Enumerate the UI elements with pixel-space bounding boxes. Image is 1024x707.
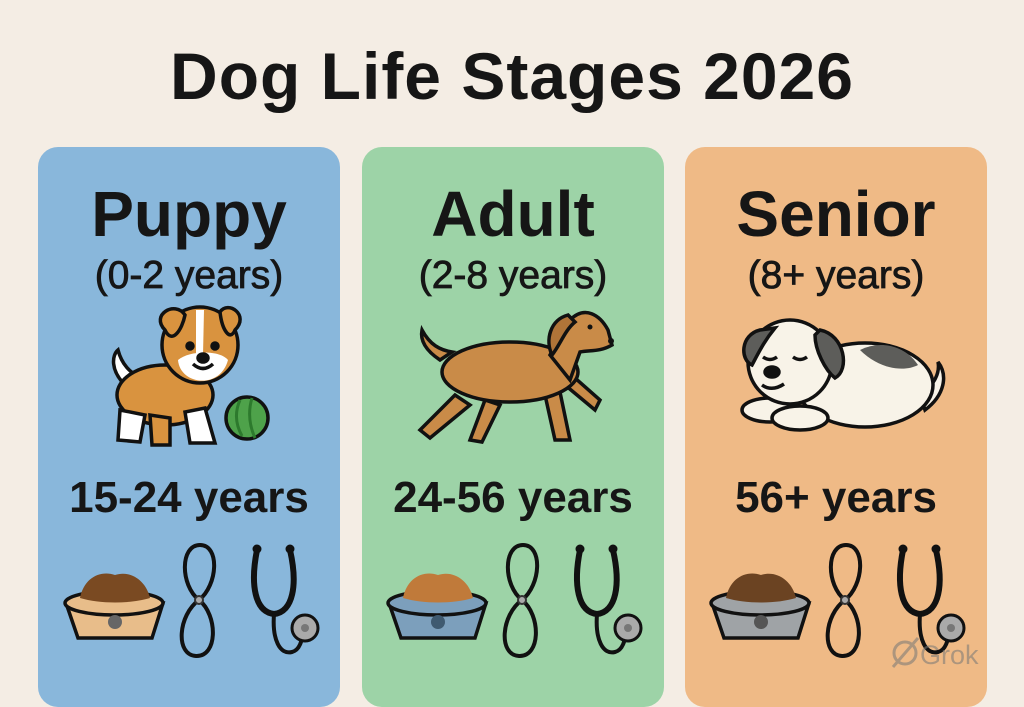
human years: senior: 56+ years — [735, 473, 937, 522]
heading: puppy: Puppy — [91, 178, 287, 250]
panel: senior — [685, 147, 987, 707]
age range: senior: (8+ years) — [748, 254, 924, 297]
icon: adult running dog — [420, 313, 614, 442]
age range: adult: (2-8 years) — [419, 254, 607, 297]
watermark: Grok: Grok — [920, 640, 979, 670]
tools: adult — [388, 545, 641, 656]
age range: puppy: (0-2 years) — [95, 254, 283, 297]
heading: adult: Adult — [431, 178, 595, 250]
heading: senior: Senior — [736, 178, 936, 250]
panel: adult — [362, 147, 664, 707]
icon: puppy with ball — [114, 307, 268, 445]
human years: adult: 24-56 years — [393, 473, 633, 522]
panel: puppy — [38, 147, 340, 707]
tools: puppy — [65, 545, 318, 656]
watermark: Grok — [893, 638, 979, 670]
icon: senior sleeping dog — [742, 320, 944, 430]
title: Dog Life Stages 2026 — [170, 39, 854, 113]
tools: senior — [711, 545, 964, 656]
human years: puppy: 15-24 years — [69, 473, 309, 522]
